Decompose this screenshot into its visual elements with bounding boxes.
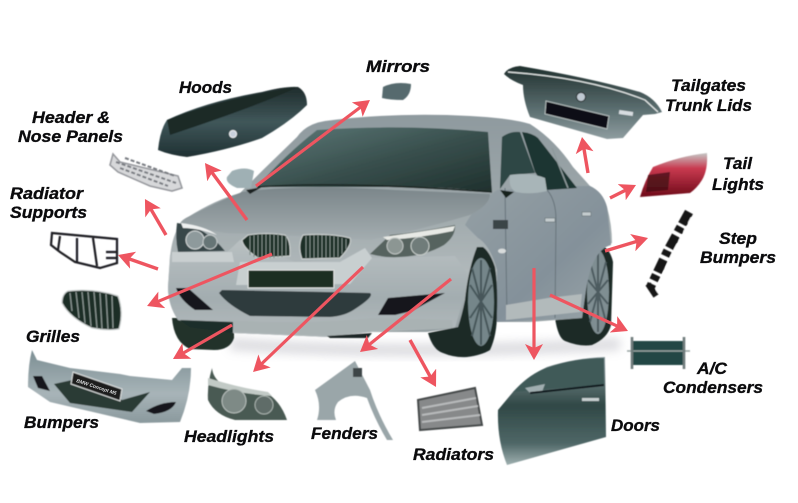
front wheel [428,247,497,357]
label: Hoods: Hoods [179,78,232,97]
label: Tailgates Trunk Lids [665,76,752,115]
label: Tailgates Trunk Lids: Tailgates [671,76,746,95]
part: step bumper [648,212,692,296]
label: Radiators: Radiators [413,445,494,464]
label: AC Condensers: Condensers [663,378,763,397]
door lines [505,188,556,320]
part: radiator support [51,233,117,268]
lower intake [219,290,371,317]
arrow: grilles [157,254,272,302]
arrow: step bumpers [605,241,638,251]
label: Radiator Supports: Supports [10,203,87,222]
arrow: headlights [261,267,363,364]
arrow: fenders [369,279,451,345]
right mirror [510,174,547,193]
label: Step Bumpers: Bumpers [700,248,776,267]
windshield [257,127,492,192]
label: Headlights: Headlights [184,427,274,446]
arrow: tailgates [584,148,588,173]
part: header and nose panel [110,154,182,191]
part: bumper [28,350,191,423]
label: Grilles: Grilles [26,327,80,346]
left fog opening [176,288,213,310]
left kidney grille [242,234,290,258]
label: Header and Nose Panels: Nose Panels [18,127,123,146]
arrow: doors [532,268,536,349]
side windows [500,132,535,189]
arrow: hoods [212,172,247,220]
arrow: header panels [150,208,166,235]
label: Tail Lights: Lights [712,175,764,194]
car body [168,115,612,337]
label: Doors: Doors [611,416,660,435]
side panel [465,186,611,322]
label: Header and Nose Panels [18,108,123,146]
side vent [493,220,508,229]
arrow: radiator supports [128,259,158,269]
arrow: AC condensers [550,295,618,326]
part: hood [158,87,307,157]
arrow: bumpers [182,325,232,354]
lower sill [506,294,582,320]
label: Header and Nose Panels: Header & [32,108,110,127]
label: Step Bumpers: Step [719,229,757,248]
label: AC Condensers: A/C [696,359,728,378]
label: Mirrors: Mirrors [366,57,430,76]
car [168,115,620,357]
arrow: radiators [410,340,431,377]
bumper plate text: BMW Concept M5 [75,378,117,397]
part: grille [62,290,121,330]
part: headlight [208,368,287,420]
label: Step Bumpers [700,229,776,267]
right headlight [370,225,455,257]
label: Tail Lights: Tail [723,154,753,173]
right fog opening [378,293,445,315]
label: Radiator Supports: Radiator [10,184,84,203]
part: radiator [418,388,482,430]
part: door [498,357,606,465]
front left tire [172,318,234,350]
rear wheel [555,245,613,346]
arrow: tail lights [610,190,626,198]
part: fender [315,361,393,440]
part: tail light [640,153,707,197]
left mirror [227,168,254,188]
label: AC Condensers [663,359,763,397]
label: Bumpers: Bumpers [24,413,99,432]
arrow: mirrors [256,107,361,186]
part: tailgate / trunk lid [504,66,662,139]
right kidney grille [300,234,351,259]
label: Radiator Supports [10,184,87,222]
lower lip [228,318,453,336]
label: Tailgates Trunk Lids: Trunk Lids [665,96,752,115]
part: AC condenser [627,337,690,369]
label: Fenders: Fenders [311,424,378,443]
licence plate recess [248,270,334,288]
part: mirror [382,83,411,100]
bumper front [168,240,467,337]
label: Tail Lights [712,154,764,194]
hood [178,187,490,240]
left headlight [176,223,225,252]
